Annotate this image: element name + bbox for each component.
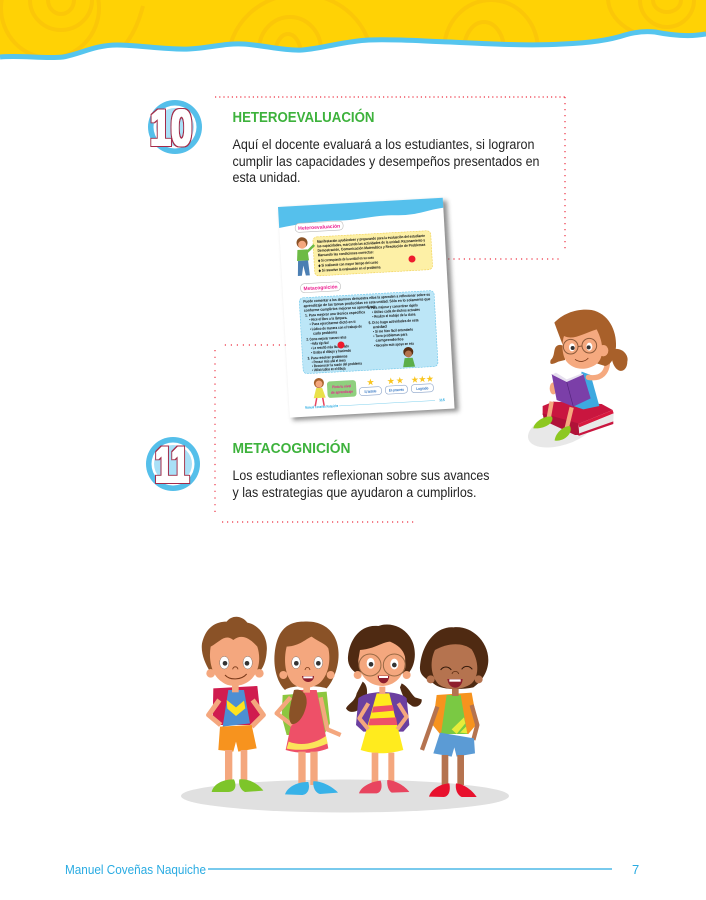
heading: Metacognición: METACOGNICIÓN (232, 439, 350, 457)
thumbnail: blue box: • Necesito más apoyo en esa (374, 342, 415, 348)
thumbnail: yellow box (313, 231, 433, 276)
illustration: girl with green backpack (274, 622, 341, 795)
red dot: connector Metacognición (338, 342, 344, 348)
thumbnail: Heteroevaluación tag: Heteroevaluación (298, 224, 340, 232)
text block: metacognición description (232, 468, 490, 500)
thumbnail: blue box: • Pensar más allá el tema (312, 358, 346, 364)
footer: page number: 7 (632, 862, 639, 877)
thumbnail: self-rating stars: En proceso (389, 388, 404, 393)
thumbnail: blue box: • Utilizo cada de dichos actuales (372, 308, 420, 314)
thumbnail: yellow box: ◆ Si corresponde de la unidad en su caso (317, 256, 375, 263)
thumbnail: blue box: unidad (373, 325, 388, 329)
thumbnail: blue box: • Le resultó más fácil usado (311, 344, 350, 350)
text block: metacognición description: y las estrategias que ayudaron a cumplirlos. (232, 485, 476, 500)
thumbnail: blue box: • Hallar algo fácil (311, 341, 329, 346)
thumbnail: yellow box: Manifestación ayudándose y preparando para la evaluación del estudiante (317, 234, 425, 244)
text block: heteroevaluación description: Aquí el docente evaluará a los estudiantes, si lograron (232, 137, 534, 152)
thumbnail: blue box (299, 290, 438, 374)
thumbnail: boy figure (296, 237, 316, 276)
thumbnail: green level box: de aprendizaje (331, 390, 353, 395)
thumbnail: blue box: • Usaba el dibujo y haciendo (311, 349, 352, 355)
thumbnail: blue box: • Utilizó tablas en el dibujo. (312, 366, 346, 372)
text block: heteroevaluación description: cumplir las capacidades y desempeños presentados en (232, 154, 540, 169)
thumbnail: blue box: • Reconocer la razón del problema (312, 362, 363, 368)
thumbnail: yellow box: Demostración, Comunicación Matemática y Resolución de Problemas (317, 243, 425, 253)
illustration: boy with red backpack (202, 617, 267, 792)
thumbnail: small seated child (402, 347, 415, 367)
sample page thumbnail (278, 198, 459, 421)
thumbnail: blue box: • Si me hizo fácil entenderlo (373, 328, 414, 334)
thumbnail: blue box: 5. Di lo hago actividades de esta (369, 318, 419, 325)
text block: heteroevaluación description: esta unidad. (232, 170, 300, 185)
thumbnail: blue box: • Lúdico de manera con el trabajo de (310, 325, 362, 331)
thumbnail: footer: Manuel Coveñas Naquiche (305, 404, 338, 410)
thumbnail: blue box: 3. Para resolver problemas (307, 354, 348, 361)
thumbnail: Metacognición tag: Metacognición (303, 284, 338, 292)
thumbnail: self-rating stars: Logrado (416, 386, 429, 391)
ground shadow under children (181, 780, 509, 812)
thumbnail: Metacognición tag (300, 282, 341, 293)
thumbnail: blue box: cada problema (313, 330, 338, 336)
thumbnail: yellow box: ◆ Si realizaste con mayor tiempo del curso (317, 260, 379, 268)
thumbnail: blue box: • Tuvo problemas para (373, 332, 408, 338)
thumbnail: self-rating stars: ★ (396, 375, 404, 386)
thumbnail: blue box: • Hice el libro a la lámpara. (309, 316, 347, 322)
thumbnail: blue box: 2. Como mejorar nuevos retos (306, 335, 346, 342)
red dot: connector Heteroevaluación (408, 256, 416, 262)
thumbnail: yellow box: las capacidades, marcando las actividades de la unidad: Razonamiento y (317, 238, 426, 248)
thumbnail: blue box: conforme cumplirlos mejorar su aprendizaje (304, 305, 376, 313)
heading: Heteroevaluación: HETEROEVALUACIÓN (232, 108, 374, 126)
thumbnail: self-rating stars: ★ (366, 377, 375, 387)
text block: metacognición description: Los estudiantes reflexionan sobre sus avances (232, 468, 490, 483)
thumbnail: green level box: Pinta tu nivel (332, 384, 351, 389)
thumbnail: self-rating stars: ★ (418, 374, 427, 384)
header: yellow wavy band (0, 0, 706, 60)
thumbnail: self-rating stars: Sí, bastante (364, 389, 377, 394)
thumbnail: blue box: • Para ejercitarme dictó en ti (309, 320, 356, 326)
thumbnail: self-rating stars: ★ (426, 374, 434, 384)
text block: heteroevaluación description (232, 137, 540, 185)
footer: author name: Manuel Coveñas Naquiche (65, 862, 206, 877)
thumbnail: self-rating stars (359, 374, 435, 396)
illustration: boy with orange backpack (420, 627, 488, 797)
thumbnail: green level box (327, 380, 357, 398)
thumbnail: blue box: comprenderlos (376, 337, 404, 343)
thumbnail: blue wave band (278, 198, 444, 228)
thumbnail: yellow box: ◆ Si resuelve la evaluación en el problema (318, 265, 381, 273)
thumbnail: footer: 115 (439, 398, 445, 402)
thumbnail: blue box: • Realizo el trabajo de la clase. (372, 312, 416, 319)
illustration: girl with glasses and purple backpack (346, 624, 422, 793)
thumbnail: blue box: 4. Para mejorar y convertirse rápido (368, 303, 418, 310)
thumbnail: self-rating stars: ★ (387, 376, 395, 386)
thumbnail: small girl (313, 378, 326, 406)
thumbnail: yellow box: Marcando las condiciones correctas: (318, 250, 374, 257)
thumbnail: self-rating stars: ★ (411, 374, 419, 385)
thumbnail: blue box: 1. Para mejorar una técnica específica (305, 310, 366, 318)
illustration: girl reading on books (523, 310, 628, 455)
badge: number 10: 10 (150, 100, 192, 156)
thumbnail: footer (305, 398, 445, 410)
thumbnail: blue box: Puede comentar a los alumnos demuestra ellos la aprenden a reflexionar sobre su (303, 293, 431, 304)
badge: number 11: 11 (155, 437, 189, 493)
thumbnail: Heteroevaluación tag (295, 221, 343, 233)
thumbnail: blue box: aprendizaje de las tareas producidas en esta unidad. Sólo en lo solamente que (303, 297, 430, 308)
